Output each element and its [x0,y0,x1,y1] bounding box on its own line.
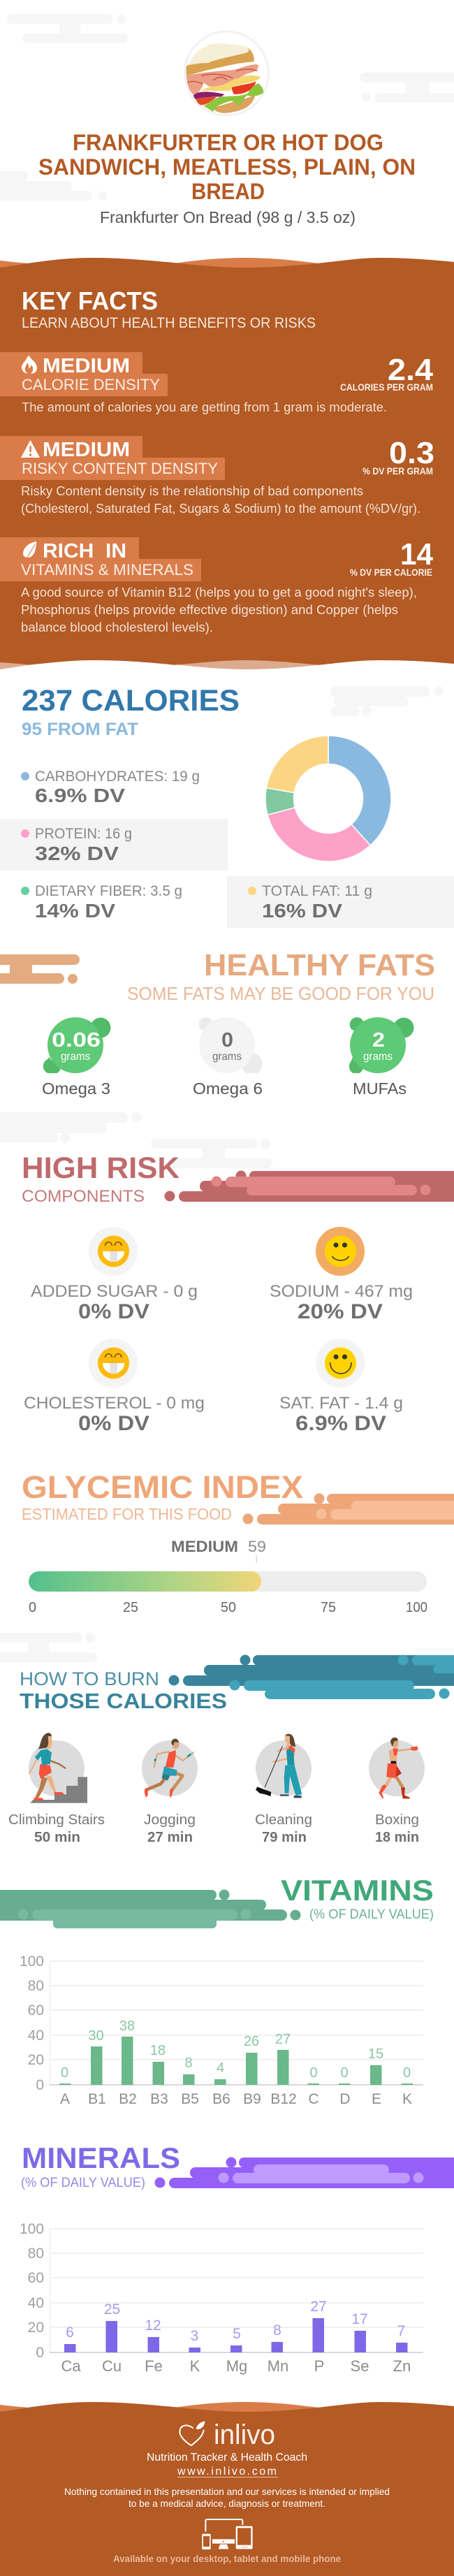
bar chart: vitamins: E [372,2091,381,2107]
fact: calorie density: MEDIUM [43,355,130,377]
panel: vitamins [0,1874,434,2107]
bar chart: minerals: 6 [66,2324,74,2341]
macro: protein: 32% DV [35,843,119,864]
bar chart: vitamins: 80 [28,1978,44,1994]
icon: jogger [145,1739,193,1798]
fact: rich in vitamins and minerals [0,537,433,634]
bar chart: vitamins [20,1953,423,2107]
MUFAs [349,1017,413,1098]
fact: calorie density [0,352,434,414]
logo: inlivo [180,2419,275,2450]
saturated fat [279,1339,403,1435]
bar chart: minerals: 3 [191,2328,198,2344]
bar chart: vitamins: 38 [119,2018,135,2034]
title: BREAD [191,179,265,204]
panel: calories [0,684,454,928]
activity: boxing: Boxing [375,1812,419,1828]
title [38,130,416,204]
activity: boxing: 18 min [375,1830,419,1845]
decorative header shape [155,2157,454,2188]
gauge reading [171,1538,266,1563]
bar chart: vitamins: A [60,2091,70,2107]
macro: total fat [248,883,372,922]
decorative header shape [243,1494,454,1525]
bar chart: vitamins: 40 [28,2028,44,2044]
icon: heart with leaf [180,2421,205,2445]
icon: woman sweeping [256,1734,302,1798]
bar chart: minerals: 40 [28,2295,44,2311]
icon: wide smile emoji [325,1347,356,1379]
bar chart: minerals: 80 [28,2246,44,2262]
bar chart: vitamins: B3 [150,2091,168,2107]
bar chart: vitamins: 0 [61,2065,68,2081]
MUFAs: grams [363,1051,393,1063]
panel: glycemic index [22,1469,454,1615]
decorative header shape [0,954,80,984]
decorative header shape [169,1654,454,1699]
key facts heading: KEY FACTS [22,286,158,315]
fact: rich in vitamins and minerals: Phosphorus (helps provide effective digestion) and Copper (helps [21,603,398,617]
bar chart: minerals: Zn [393,2357,411,2375]
bar chart: vitamins: 0 [309,2065,318,2081]
macro: dietary fiber: DIETARY FIBER: 3.5 g [35,883,182,899]
sodium: 20% DV [298,1300,383,1323]
activity: boxing [369,1738,425,1845]
icon: desktop, tablet and phone [202,2519,253,2549]
bar chart: vitamins: 30 [88,2028,104,2044]
fact: risky content density: % DV PER GRAM [363,465,433,476]
glycemic index heading: GLYCEMIC INDEX [22,1469,303,1505]
fact: risky content density: Risky Content density is the relationship of bad components [21,484,363,498]
MUFAs: MUFAs [353,1079,407,1098]
disclaimer [64,2486,390,2509]
bar chart: minerals: 0 [36,2345,44,2361]
minerals subheading: (% OF DAILY VALUE) [21,2176,145,2190]
fact: risky content density [0,436,434,516]
gauge bar [29,1571,427,1592]
activity: jogging: Jogging [144,1812,196,1828]
healthy fats subheading: SOME FATS MAY BE GOOD FOR YOU [127,983,434,1004]
bar chart: minerals: 5 [233,2326,241,2342]
those calories heading: THOSE CALORIES [20,1689,227,1713]
bar chart: vitamins: 0 [36,2077,44,2093]
fact: rich in vitamins and minerals: A good source of Vitamin B12 (helps you to get a good night's sleep), [21,585,417,599]
omega 6: grams [212,1051,242,1063]
bar chart: vitamins: D [339,2091,351,2107]
gauge scale: 100 [406,1600,427,1615]
added sugar: ADDED SUGAR - 0 g [31,1282,198,1301]
bar chart: vitamins: B2 [119,2091,137,2107]
activity: climbing stairs: 50 min [34,1830,80,1845]
panel: minerals [20,2141,454,2375]
saturated fat: 6.9% DV [295,1412,386,1435]
high risk heading: HIGH RISK [22,1151,180,1185]
key facts subheading: LEARN ABOUT HEALTH BENEFITS OR RISKS [22,315,316,331]
bar chart: minerals: 60 [28,2270,44,2286]
high risk subheading: COMPONENTS [22,1187,145,1206]
bar chart: vitamins: C [308,2091,319,2107]
minerals heading: MINERALS [22,2141,180,2174]
macro: carbohydrates [21,769,200,806]
serving size subtitle: Frankfurter On Bread (98 g / 3.5 oz) [100,208,356,226]
icon: grinning emoji [98,1235,129,1267]
macro: protein: PROTEIN: 16 g [35,826,132,842]
vitamins heading: VITAMINS [281,1874,434,1907]
bar chart: vitamins: 4 [217,2060,224,2076]
bar chart: minerals: 25 [104,2301,120,2317]
MUFAs: 2 [372,1029,385,1051]
activity: climbing stairs [8,1733,105,1845]
disclaimer: to be a medical advice, diagnosis or treatment. [129,2498,325,2509]
gauge scale: 50 [221,1600,236,1615]
activity: cleaning: Cleaning [255,1812,312,1828]
healthy fats heading: HEALTHY FATS [204,948,435,982]
donut chart [265,736,391,861]
omega 3: grams [61,1051,90,1063]
fact: risky content density: 0.3 [389,436,434,470]
title: FRANKFURTER OR HOT DOG [73,130,383,155]
cholesterol [24,1339,205,1435]
macro: dietary fiber [21,883,182,922]
fact: rich in vitamins and minerals: 14 [400,537,433,572]
gauge scale: 0 [29,1600,36,1615]
panel: high risk components [22,1151,454,1435]
bar chart: vitamins: B9 [243,2091,261,2107]
gauge reading: 59 [248,1538,266,1555]
omega 3: 0.06 [52,1029,101,1051]
activity: climbing stairs: Climbing Stairs [8,1812,105,1828]
cholesterol: CHOLESTEROL - 0 mg [24,1394,205,1413]
food photo: sandwich in ring [184,31,268,115]
icon: flame [22,355,37,374]
bar chart: minerals: 8 [273,2322,281,2338]
macro: carbohydrates: CARBOHYDRATES: 19 g [35,769,200,785]
added sugar: 0% DV [78,1300,149,1323]
website link: www.inlivo.com [177,2466,277,2477]
decorative header shape [165,1171,454,1202]
icon: warning triangle [21,440,40,458]
sodium [270,1227,413,1323]
calories from fat: 95 FROM FAT [22,720,138,739]
bar chart: minerals: 7 [397,2323,405,2339]
bar chart: vitamins: B12 [270,2091,297,2107]
bar chart: minerals: Fe [145,2357,163,2375]
bar chart: vitamins: K [402,2091,412,2107]
bar chart: vitamins: 26 [244,2034,259,2049]
gauge scale: 25 [123,1600,138,1615]
bar chart: minerals: Se [351,2357,369,2375]
bar chart: vitamins: B5 [181,2091,199,2107]
icon: boxer [379,1738,418,1798]
bar chart: minerals: Ca [61,2357,81,2375]
bar chart: minerals: 27 [310,2299,327,2315]
bar chart: minerals: 100 [20,2221,44,2237]
panel: how to burn calories [8,1654,454,1845]
omega 6: Omega 6 [193,1079,263,1098]
fact: calorie density: The amount of calories you are getting from 1 gram is moderate. [22,400,387,414]
bar chart: minerals: 17 [351,2311,368,2327]
bar chart: vitamins: 8 [184,2055,193,2071]
sodium: SODIUM - 467 mg [270,1282,413,1301]
bar chart: minerals: Mn [268,2357,288,2375]
macro: carbohydrates: 6.9% DV [35,785,125,806]
fact: rich in vitamins and minerals: VITAMINS & MINERALS [21,561,193,578]
added sugar [31,1227,198,1323]
gauge scale: 75 [321,1600,336,1615]
availability note: Available on your desktop, tablet and mobile phone [113,2553,341,2564]
activity: cleaning [255,1734,312,1845]
fact: risky content density: (Cholesterol, Saturated Fat, Sugars & Sodium) to the amount (%DV/gr). [21,502,420,516]
how to burn heading: HOW TO BURN [20,1668,159,1689]
bar chart: minerals: P [314,2357,324,2375]
macro: total fat: 16% DV [262,900,342,922]
bar chart: vitamins: B1 [88,2091,106,2107]
omega 6 [193,1017,263,1098]
icon: leaf [23,541,36,558]
bar chart: minerals [20,2221,423,2375]
bar chart: vitamins: 20 [28,2052,44,2068]
bar chart: vitamins: 27 [275,2032,291,2047]
title: SANDWICH, MEATLESS, PLAIN, ON [38,154,416,180]
decorative header shape [0,1889,300,1928]
bar chart: vitamins: 18 [150,2043,166,2058]
bar chart: vitamins: 0 [403,2065,411,2081]
fact: calorie density: 2.4 [388,353,434,387]
fact: risky content density: MEDIUM [43,439,130,461]
fact: rich in vitamins and minerals: RICH IN [43,540,126,562]
omega 3 [42,1017,110,1098]
bar chart: vitamins: 15 [368,2046,383,2062]
gauge scale [29,1600,427,1615]
macro: total fat: TOTAL FAT: 11 g [262,883,372,899]
fact: rich in vitamins and minerals: balance blood cholesterol levels). [21,620,213,634]
logo: inlivo: inlivo [214,2419,275,2450]
omega 6: 0 [221,1029,233,1051]
fact: rich in vitamins and minerals: % DV PER CALORIE [350,567,432,578]
disclaimer: Nothing contained in this presentation and our services is intended or implied [64,2486,390,2497]
glycemic index subheading: ESTIMATED FOR THIS FOOD [22,1505,232,1523]
panel: healthy fats [0,948,435,1098]
activity: jogging [142,1739,198,1845]
vitamins subheading: (% OF DAILY VALUE) [309,1907,434,1922]
bar chart: minerals: 20 [28,2320,44,2336]
icon: woman climbing stairs [29,1733,87,1803]
panel: footer [0,2402,454,2576]
tagline: Nutrition Tracker & Health Coach [147,2452,307,2464]
bar chart: minerals: K [190,2357,200,2375]
activity: jogging: 27 min [147,1830,193,1845]
bar chart: minerals: Cu [102,2357,122,2375]
bar chart: minerals: 12 [145,2317,161,2334]
gauge reading: MEDIUM [171,1538,238,1555]
calories heading: 237 CALORIES [22,684,240,718]
cholesterol: 0% DV [78,1412,149,1435]
bar chart: vitamins: 0 [340,2065,349,2081]
fact: risky content density: RISKY CONTENT DENSITY [22,460,218,477]
icon: grinning emoji [98,1347,129,1379]
fact: calorie density: CALORIES PER GRAM [340,381,433,393]
panel: key facts [0,258,454,669]
bar chart: vitamins: 60 [28,2002,44,2018]
bar chart: vitamins: B6 [212,2091,230,2107]
saturated fat: SAT. FAT - 1.4 g [279,1394,403,1413]
macro: protein [21,826,132,864]
omega 3: Omega 3 [42,1079,110,1098]
activity: cleaning: 79 min [262,1830,307,1845]
macro: dietary fiber: 14% DV [35,900,115,922]
bar chart: minerals: Mg [226,2357,247,2375]
icon: smiling emoji [325,1235,356,1267]
bar chart: vitamins: 100 [20,1953,44,1970]
fact: calorie density: CALORIE DENSITY [22,376,160,393]
